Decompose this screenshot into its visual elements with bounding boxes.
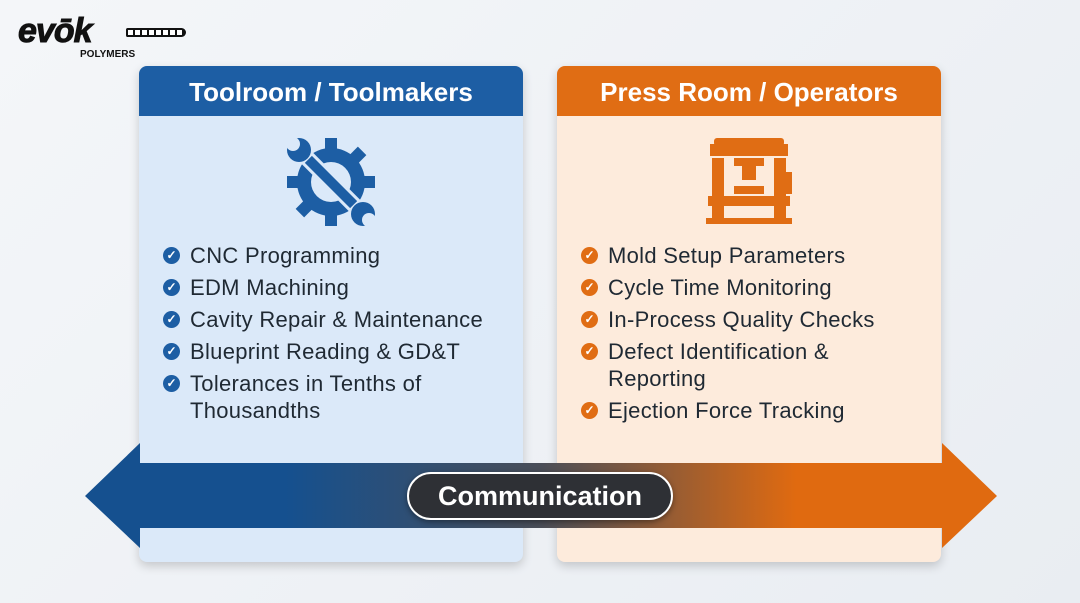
list: press room skills: Mold Setup Parameters [608,243,845,268]
callout: communication: Communication [438,481,642,511]
list: toolroom skills: ✓ [166,248,177,262]
logo [18,12,186,60]
panel: toolroom [139,66,523,562]
list: toolroom skills: ✓ [166,344,177,358]
list: press room skills: Ejection Force Tracking [608,398,845,423]
logo: evōk [18,12,92,50]
list: toolroom skills: Blueprint Reading & GD&T [190,339,460,364]
list: press room skills: Defect Identification & [608,339,829,364]
heading: press room: Press Room / Operators [600,77,898,107]
list: toolroom skills: ✓ [166,376,177,390]
list: press room skills: ✓ [584,312,595,326]
list: toolroom skills: Tolerances in Tenths of [190,371,422,396]
list: press room skills: ✓ [584,403,595,417]
icon: press machine [706,138,792,224]
callout: communication [407,472,673,520]
list: press room skills [581,243,875,423]
heading: toolroom: Toolroom / Toolmakers [189,77,473,107]
list: press room skills: ✓ [584,248,595,262]
list: press room skills: Cycle Time Monitoring [608,275,832,300]
logo: POLYMERS [80,49,135,60]
icon: gear wrench [287,138,375,226]
list: press room skills: ✓ [584,280,595,294]
list: toolroom skills [163,243,483,423]
list: toolroom skills: CNC Programming [190,243,380,268]
heading: press room [557,66,941,116]
list: toolroom skills: Cavity Repair & Maintenance [190,307,483,332]
list: toolroom skills: EDM Machining [190,275,349,300]
list: press room skills: ✓ [584,344,595,358]
list: press room skills: Reporting [608,366,706,391]
list: toolroom skills: ✓ [166,312,177,326]
heading: toolroom [139,66,523,116]
panel: press room [557,66,941,562]
list: press room skills: In-Process Quality Checks [608,307,875,332]
list: toolroom skills: Thousandths [190,398,320,423]
list: toolroom skills: ✓ [166,280,177,294]
